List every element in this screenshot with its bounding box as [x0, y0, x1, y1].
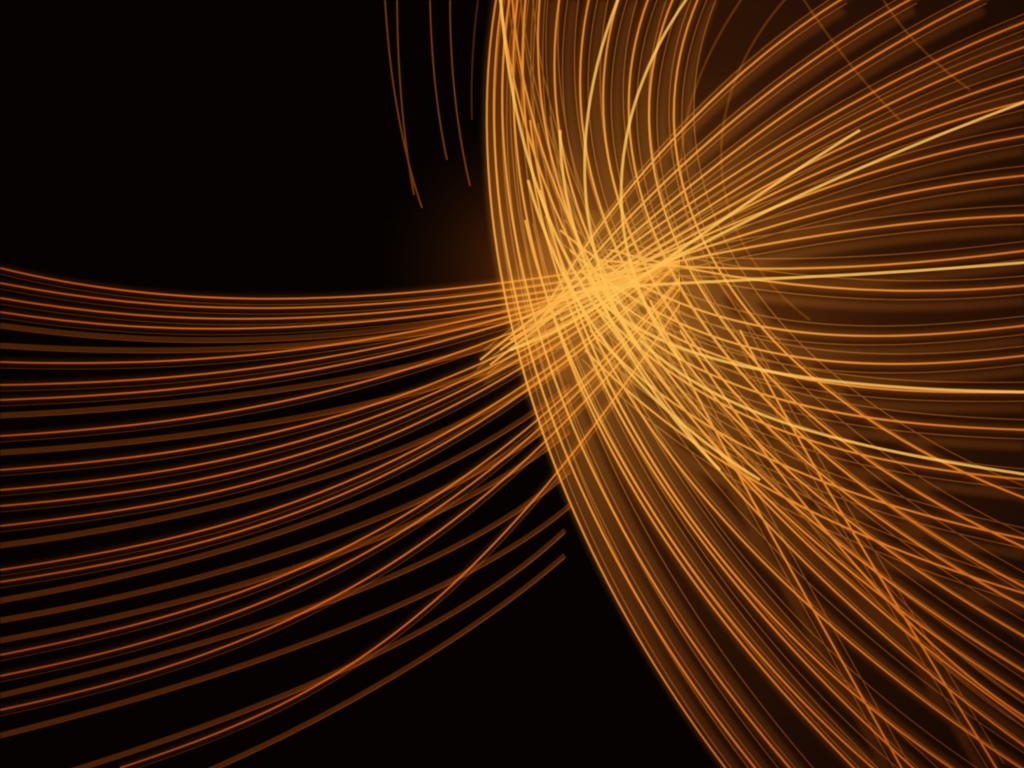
upper right faint arcs — [681, 0, 970, 340]
left fan: main streaks — [0, 252, 680, 768]
right arcs: secondary streaks — [477, 0, 1024, 768]
right disc fill — [487, 0, 1024, 768]
left fan: soft haze — [0, 258, 680, 768]
right arcs: soft bands — [474, 0, 1024, 768]
centre bright streaks — [500, 0, 1024, 480]
centre hot glow — [510, 210, 710, 390]
top faint arcs — [385, 0, 478, 208]
left fan: dim bands — [0, 295, 570, 768]
right arcs: main streaks — [480, 0, 1024, 768]
left fan: thin secondary streaks — [0, 258, 680, 768]
left fan: thin dim streaks — [0, 298, 570, 768]
